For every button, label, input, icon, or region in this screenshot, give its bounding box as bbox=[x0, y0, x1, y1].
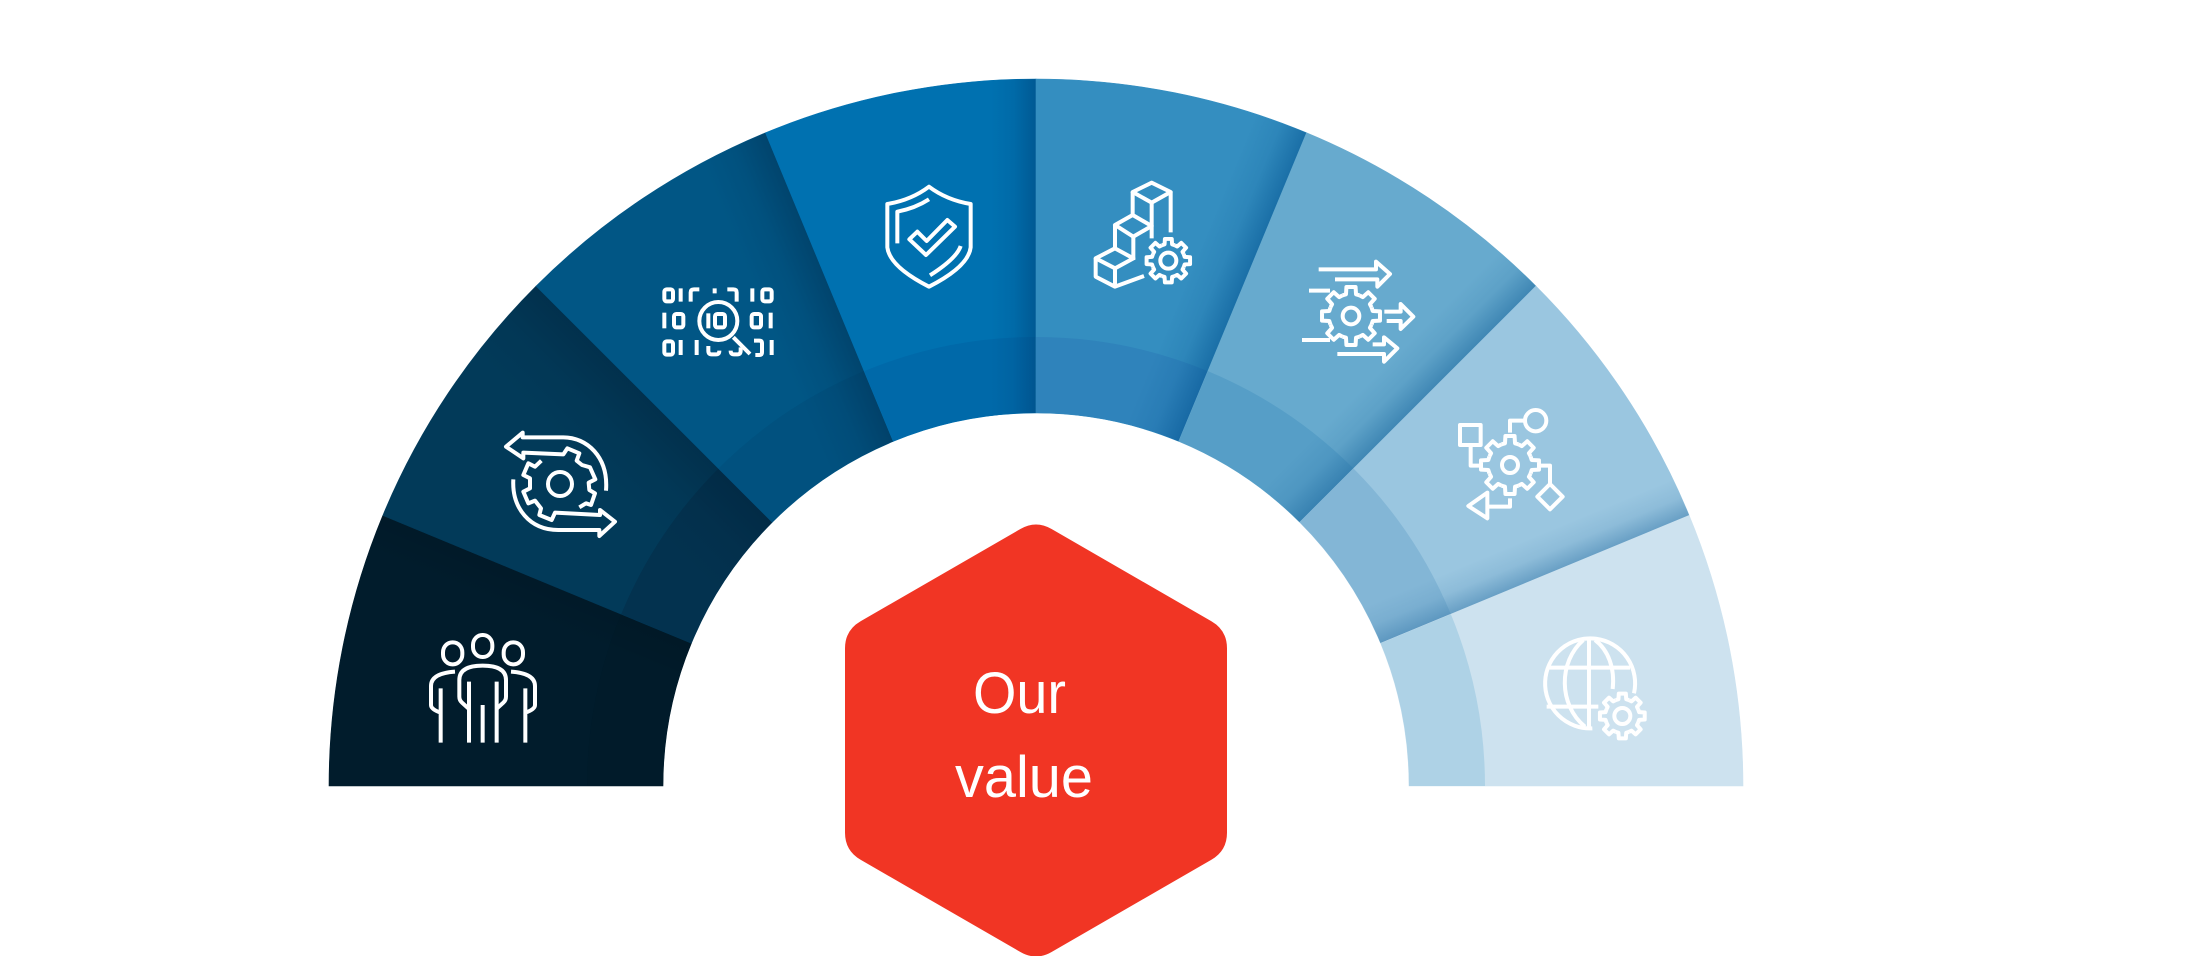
segment 2: process cycle bbox=[383, 286, 772, 643]
icon: workflow with gear bbox=[1460, 410, 1563, 518]
segment 6: fast gear bbox=[1179, 133, 1536, 522]
icon: shield with check bbox=[887, 187, 971, 287]
icon: gear with speed arrows bbox=[1302, 262, 1413, 362]
segment 4: security bbox=[765, 79, 1036, 441]
semicircle diagram bbox=[329, 79, 1743, 786]
segment 3: data bbox=[536, 133, 893, 522]
segment 1: people bbox=[329, 515, 691, 786]
segment 8: globe bbox=[1381, 515, 1743, 786]
label: value: value bbox=[955, 745, 1093, 810]
icon: stacked blocks with gear bbox=[1096, 183, 1190, 287]
icon: binary data with magnifier bbox=[664, 288, 772, 355]
segment 5: building blocks bbox=[1036, 79, 1307, 441]
center hexagon with label bbox=[845, 524, 1227, 956]
label: Our: Our bbox=[973, 661, 1066, 726]
icon: globe with gear bbox=[1545, 638, 1645, 738]
segment 7: workflow bbox=[1300, 286, 1689, 643]
icon: people bbox=[431, 635, 535, 743]
icon: process cycle with gear bbox=[506, 433, 615, 536]
